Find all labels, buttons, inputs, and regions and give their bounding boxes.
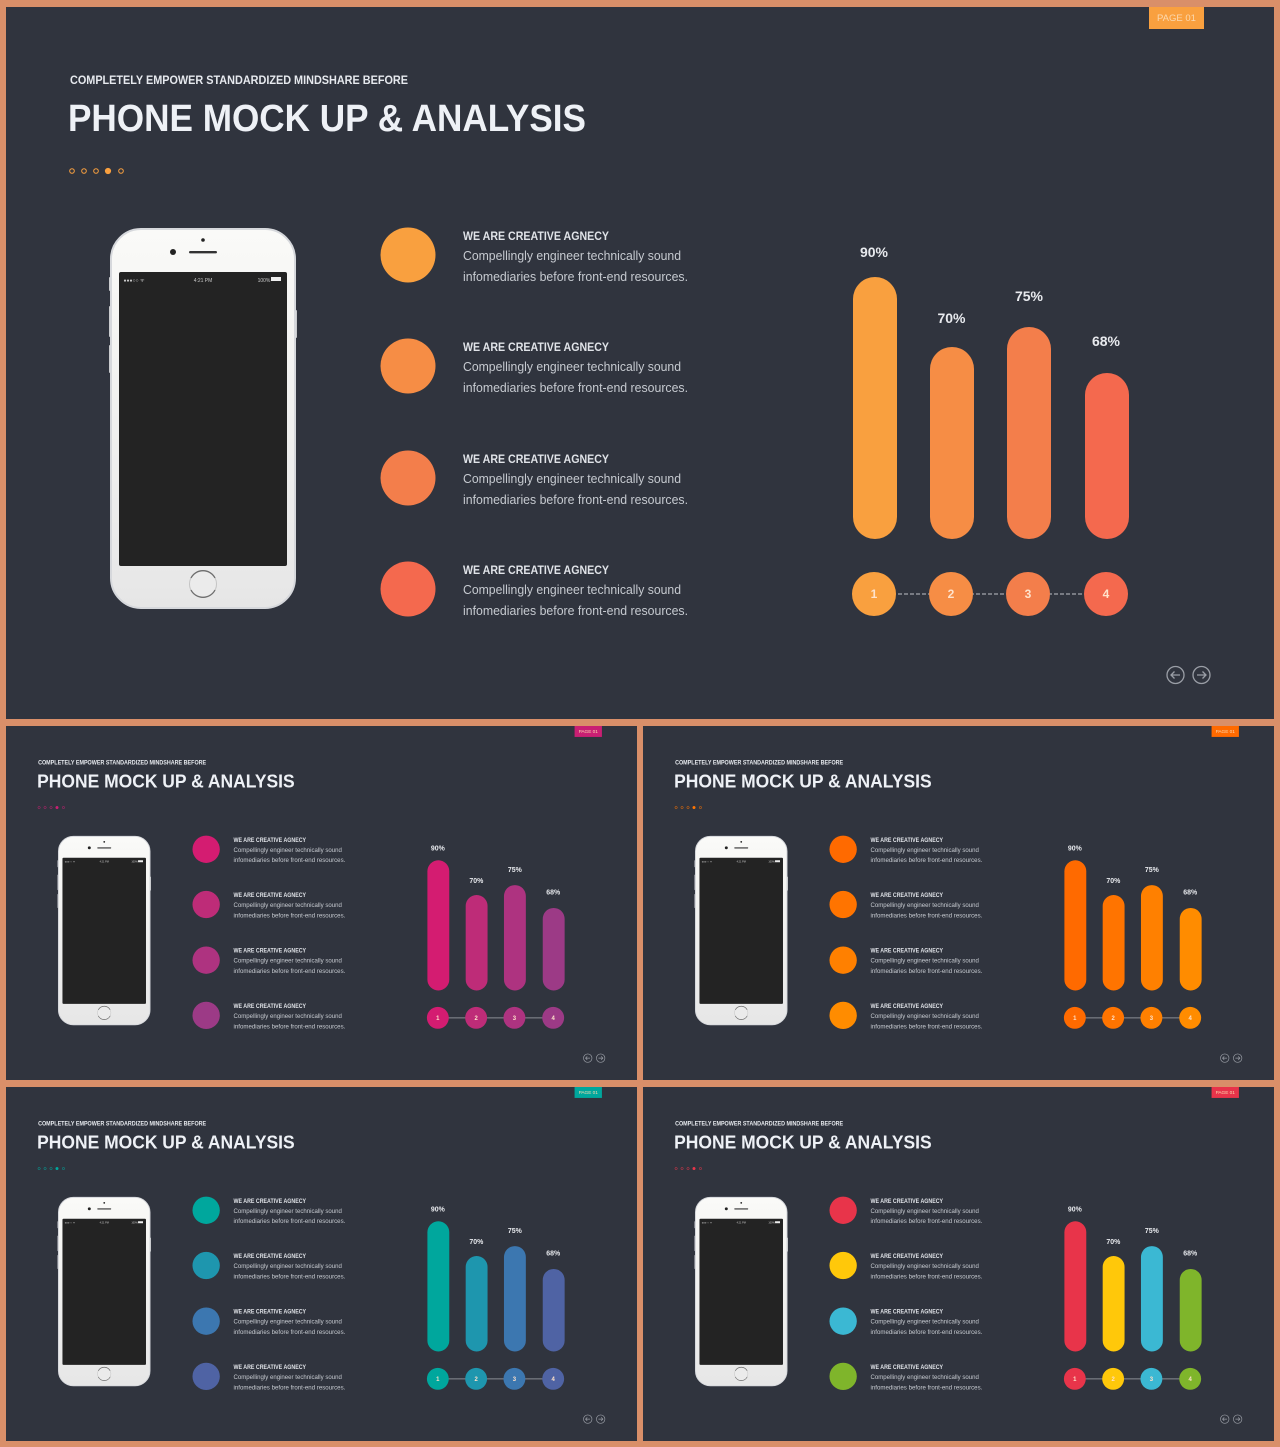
- phone mockup: 4:21 PM: [737, 1222, 746, 1225]
- pagination dots: [38, 806, 65, 809]
- title: PHONE MOCK UP & ANALYSIS: [674, 1133, 932, 1154]
- feature item 2: Compellingly engineer technically sound: [233, 902, 342, 909]
- subtitle: COMPLETELY EMPOWER STANDARDIZED MINDSHARE BEFORE: [38, 1121, 206, 1127]
- phone mockup: [57, 1197, 151, 1386]
- page tab: [575, 1087, 602, 1098]
- title: PHONE MOCK UP & ANALYSIS: [674, 772, 932, 793]
- feature item 2: [829, 891, 983, 919]
- numbered steps: 3: [513, 1377, 517, 1383]
- numbered steps: [1064, 1368, 1201, 1390]
- phone mockup: 100%: [768, 861, 776, 864]
- feature item 1: WE ARE CREATIVE AGNECY: [463, 229, 609, 243]
- phone mockup: ●●●○○ ᯤ: [702, 861, 712, 864]
- page tab: [1212, 1087, 1239, 1098]
- bar chart: 68%: [1092, 333, 1121, 349]
- bar chart: 68%: [546, 1251, 560, 1258]
- phone mockup: [109, 229, 297, 608]
- feature item 1: Compellingly engineer technically sound: [233, 1208, 342, 1215]
- bar chart: 90%: [431, 1206, 445, 1213]
- numbered steps: 2: [1111, 1016, 1115, 1022]
- feature item 2: Compellingly engineer technically sound: [870, 902, 979, 909]
- bar chart: 70%: [937, 310, 966, 326]
- feature item 4: infomediaries before front-end resources.: [233, 1023, 346, 1030]
- feature item 3: infomediaries before front-end resources.: [233, 1329, 346, 1336]
- feature item 4: Compellingly engineer technically sound: [233, 1374, 342, 1381]
- bar chart: [1064, 1206, 1202, 1352]
- bar chart: 68%: [1183, 1251, 1197, 1258]
- feature item 2: Compellingly engineer technically sound: [870, 1263, 979, 1270]
- feature item 2: [380, 338, 688, 395]
- bar chart: [1064, 845, 1202, 991]
- bar chart: [853, 244, 1129, 539]
- feature item 4: Compellingly engineer technically sound: [870, 1374, 979, 1381]
- numbered steps: [1064, 1007, 1201, 1029]
- numbered steps: 1: [436, 1377, 440, 1383]
- phone mockup: [57, 836, 151, 1025]
- feature item 1: infomediaries before front-end resources.: [870, 857, 983, 864]
- feature item 1: WE ARE CREATIVE AGNECY: [233, 838, 306, 844]
- page tab: [1149, 7, 1204, 29]
- feature item 1: infomediaries before front-end resources.: [233, 857, 346, 864]
- numbered steps: 3: [513, 1016, 517, 1022]
- feature item 4: WE ARE CREATIVE AGNECY: [233, 1365, 306, 1371]
- page tab: PAGE 01: [579, 729, 598, 735]
- phone mockup: 100%: [768, 1222, 776, 1225]
- navigation arrows: [1221, 1054, 1242, 1062]
- subtitle: COMPLETELY EMPOWER STANDARDIZED MINDSHARE BEFORE: [70, 73, 408, 87]
- navigation arrows: [1221, 1415, 1242, 1423]
- phone mockup: 4:21 PM: [100, 861, 109, 864]
- numbered steps: 1: [1073, 1377, 1077, 1383]
- phone mockup: [694, 836, 788, 1025]
- bar chart: 68%: [1183, 890, 1197, 897]
- feature item 3: WE ARE CREATIVE AGNECY: [463, 452, 609, 466]
- feature item 4: infomediaries before front-end resources.: [463, 603, 688, 618]
- feature item 4: WE ARE CREATIVE AGNECY: [233, 1004, 306, 1010]
- feature item 4: [192, 1363, 346, 1391]
- bar chart: 90%: [1068, 845, 1082, 852]
- phone mockup: ●●●○○ ᯤ: [123, 278, 145, 284]
- pagination dots: [675, 1167, 702, 1170]
- feature item 3: [829, 1308, 983, 1336]
- feature item 4: Compellingly engineer technically sound: [870, 1013, 979, 1020]
- feature item 3: [192, 1308, 346, 1336]
- numbered steps: 4: [1189, 1016, 1193, 1022]
- feature item 1: WE ARE CREATIVE AGNECY: [233, 1199, 306, 1205]
- pagination dots: [38, 1167, 65, 1170]
- page tab: PAGE 01: [579, 1090, 598, 1096]
- phone mockup: 100%: [131, 861, 139, 864]
- numbered steps: 1: [1073, 1016, 1077, 1022]
- feature item 1: infomediaries before front-end resources.: [463, 269, 688, 284]
- panel: orange theme slide: [643, 726, 1274, 1080]
- feature item 3: Compellingly engineer technically sound: [233, 958, 342, 965]
- feature item 1: infomediaries before front-end resources.: [870, 1218, 983, 1225]
- numbered steps: 4: [552, 1016, 556, 1022]
- feature item 3: WE ARE CREATIVE AGNECY: [870, 949, 943, 955]
- feature item 3: Compellingly engineer technically sound: [870, 1319, 979, 1326]
- numbered steps: [427, 1007, 564, 1029]
- subtitle: COMPLETELY EMPOWER STANDARDIZED MINDSHARE BEFORE: [38, 760, 206, 766]
- numbered steps: 3: [1150, 1377, 1154, 1383]
- panel: pink theme slide: [6, 726, 637, 1080]
- bar chart: 70%: [1106, 1239, 1120, 1246]
- feature item 3: infomediaries before front-end resources.: [233, 968, 346, 975]
- feature item 4: infomediaries before front-end resources.: [870, 1023, 983, 1030]
- feature item 4: WE ARE CREATIVE AGNECY: [870, 1365, 943, 1371]
- numbered steps: 1: [871, 587, 878, 601]
- bar chart: [427, 845, 565, 991]
- feature item 4: [380, 562, 688, 618]
- subtitle: COMPLETELY EMPOWER STANDARDIZED MINDSHARE BEFORE: [675, 1121, 843, 1127]
- feature item 3: Compellingly engineer technically sound: [463, 471, 681, 486]
- numbered steps: 2: [1111, 1377, 1115, 1383]
- feature item 3: WE ARE CREATIVE AGNECY: [233, 949, 306, 955]
- page tab: PAGE 01: [1157, 13, 1196, 24]
- panel: main slide, orange theme: [6, 7, 1274, 719]
- numbered steps: 3: [1025, 587, 1032, 601]
- feature item 3: infomediaries before front-end resources.: [463, 492, 688, 507]
- numbered steps: 4: [552, 1377, 556, 1383]
- feature item 2: infomediaries before front-end resources.: [233, 1273, 346, 1280]
- navigation arrows: [584, 1415, 605, 1423]
- page tab: [575, 726, 602, 737]
- feature item 4: infomediaries before front-end resources.: [233, 1384, 346, 1391]
- feature item 4: [829, 1002, 983, 1030]
- bar chart: 70%: [469, 878, 483, 885]
- feature item 1: infomediaries before front-end resources.: [233, 1218, 346, 1225]
- phone mockup: ●●●○○ ᯤ: [65, 861, 75, 864]
- feature item 1: Compellingly engineer technically sound: [870, 847, 979, 854]
- numbered steps: 4: [1103, 587, 1110, 601]
- navigation arrows: [584, 1054, 605, 1062]
- feature item 3: [380, 450, 688, 507]
- feature item 4: Compellingly engineer technically sound: [233, 1013, 342, 1020]
- phone mockup: 4:21 PM: [100, 1222, 109, 1225]
- numbered steps: 4: [1189, 1377, 1193, 1383]
- feature item 3: Compellingly engineer technically sound: [233, 1319, 342, 1326]
- title: PHONE MOCK UP & ANALYSIS: [68, 98, 586, 140]
- numbered steps: 2: [474, 1377, 478, 1383]
- pagination dots: [675, 806, 702, 809]
- bar chart: 75%: [508, 867, 522, 874]
- feature item 1: Compellingly engineer technically sound: [870, 1208, 979, 1215]
- feature item 2: [192, 1252, 346, 1280]
- feature item 4: infomediaries before front-end resources.: [870, 1384, 983, 1391]
- feature item 3: [829, 947, 983, 975]
- feature item 1: [380, 228, 688, 284]
- numbered steps: 1: [436, 1016, 440, 1022]
- feature item 4: Compellingly engineer technically sound: [463, 582, 681, 597]
- numbered steps: 2: [948, 587, 955, 601]
- page tab: PAGE 01: [1216, 729, 1235, 735]
- numbered steps: 3: [1150, 1016, 1154, 1022]
- feature item 1: WE ARE CREATIVE AGNECY: [870, 838, 943, 844]
- feature item 1: [192, 836, 346, 864]
- page tab: PAGE 01: [1216, 1090, 1235, 1096]
- feature item 4: WE ARE CREATIVE AGNECY: [870, 1004, 943, 1010]
- bar chart: 70%: [469, 1239, 483, 1246]
- feature item 1: [829, 1197, 983, 1225]
- bar chart: 75%: [1015, 288, 1044, 304]
- numbered steps: 2: [474, 1016, 478, 1022]
- feature item 2: Compellingly engineer technically sound: [463, 359, 681, 374]
- phone mockup: 4:21 PM: [194, 278, 212, 284]
- feature item 3: [192, 947, 346, 975]
- feature item 2: infomediaries before front-end resources.: [870, 1273, 983, 1280]
- phone mockup: 100%: [131, 1222, 139, 1225]
- feature item 3: WE ARE CREATIVE AGNECY: [233, 1310, 306, 1316]
- numbered steps: [852, 572, 1128, 616]
- feature item 1: Compellingly engineer technically sound: [233, 847, 342, 854]
- feature item 4: [829, 1363, 983, 1391]
- feature item 2: infomediaries before front-end resources.: [870, 912, 983, 919]
- feature item 1: [192, 1197, 346, 1225]
- title: PHONE MOCK UP & ANALYSIS: [37, 772, 295, 793]
- subtitle: COMPLETELY EMPOWER STANDARDIZED MINDSHARE BEFORE: [675, 760, 843, 766]
- phone mockup: [694, 1197, 788, 1386]
- phone mockup: 4:21 PM: [737, 861, 746, 864]
- feature item 2: WE ARE CREATIVE AGNECY: [870, 893, 943, 899]
- feature item 1: Compellingly engineer technically sound: [463, 248, 681, 263]
- feature item 2: [829, 1252, 983, 1280]
- page tab: [1212, 726, 1239, 737]
- pagination dots: [70, 168, 123, 174]
- panel: multicolor theme slide: [643, 1087, 1274, 1441]
- bar chart: 75%: [508, 1228, 522, 1235]
- feature item 2: WE ARE CREATIVE AGNECY: [233, 1254, 306, 1260]
- feature item 3: infomediaries before front-end resources.: [870, 968, 983, 975]
- feature item 2: WE ARE CREATIVE AGNECY: [463, 340, 609, 354]
- feature item 2: [192, 891, 346, 919]
- feature item 3: infomediaries before front-end resources.: [870, 1329, 983, 1336]
- bar chart: 75%: [1145, 1228, 1159, 1235]
- panel: teal-blue theme slide: [6, 1087, 637, 1441]
- navigation arrows: [1167, 666, 1210, 684]
- bar chart: 70%: [1106, 878, 1120, 885]
- phone mockup: ●●●○○ ᯤ: [702, 1222, 712, 1225]
- feature item 2: WE ARE CREATIVE AGNECY: [870, 1254, 943, 1260]
- feature item 3: WE ARE CREATIVE AGNECY: [870, 1310, 943, 1316]
- bar chart: 90%: [860, 244, 889, 260]
- phone mockup: 100%: [258, 278, 271, 284]
- feature item 1: [829, 836, 983, 864]
- feature item 2: infomediaries before front-end resources.: [463, 380, 688, 395]
- bar chart: [427, 1206, 565, 1352]
- bar chart: 75%: [1145, 867, 1159, 874]
- numbered steps: [427, 1368, 564, 1390]
- bar chart: 68%: [546, 890, 560, 897]
- feature item 3: Compellingly engineer technically sound: [870, 958, 979, 965]
- feature item 4: WE ARE CREATIVE AGNECY: [463, 563, 609, 577]
- feature item 2: WE ARE CREATIVE AGNECY: [233, 893, 306, 899]
- phone mockup: ●●●○○ ᯤ: [65, 1222, 75, 1225]
- feature item 2: Compellingly engineer technically sound: [233, 1263, 342, 1270]
- bar chart: 90%: [1068, 1206, 1082, 1213]
- feature item 1: WE ARE CREATIVE AGNECY: [870, 1199, 943, 1205]
- feature item 2: infomediaries before front-end resources.: [233, 912, 346, 919]
- feature item 4: [192, 1002, 346, 1030]
- bar chart: 90%: [431, 845, 445, 852]
- title: PHONE MOCK UP & ANALYSIS: [37, 1133, 295, 1154]
